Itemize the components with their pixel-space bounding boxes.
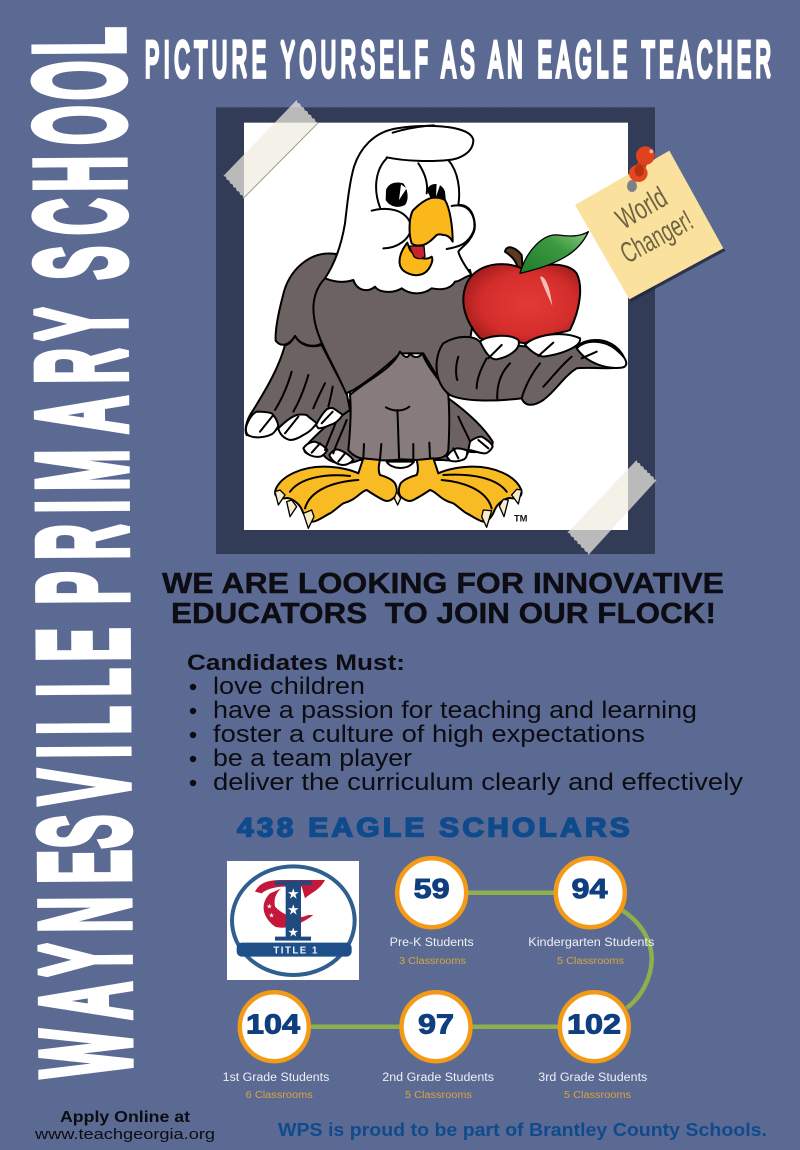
apply online: Apply Online at bbox=[60, 1109, 190, 1126]
frame bbox=[216, 107, 655, 554]
stat: first grade: 104 bbox=[246, 1008, 300, 1040]
stat: pre-k bbox=[390, 858, 474, 967]
right wing and hand bbox=[437, 337, 625, 405]
tape bottom right bbox=[567, 460, 657, 555]
apple bbox=[463, 232, 588, 343]
picture frame with eagle mascot bbox=[216, 100, 726, 555]
slogan: WE ARE LOOKING FOR INNOVATIVE bbox=[162, 568, 724, 600]
apply online bbox=[34, 1109, 215, 1143]
face details bbox=[372, 125, 474, 275]
connector line bbox=[274, 893, 652, 1027]
title 1 logo: ★ bbox=[266, 902, 272, 910]
left foot bbox=[275, 458, 397, 528]
apply online: www.teachgeorgia.org bbox=[34, 1126, 215, 1143]
title 1 logo: ★ bbox=[287, 885, 300, 901]
stat: pre-k: 3 Classrooms bbox=[399, 956, 466, 967]
stat: third grade: 5 Classrooms bbox=[564, 1090, 631, 1101]
stat: kindergarten: Kindergarten Students bbox=[528, 937, 655, 949]
bullet list: be a team player bbox=[213, 745, 412, 772]
bullet list: foster a culture of high expectations bbox=[213, 721, 645, 748]
stat: third grade: 3rd Grade Students bbox=[538, 1072, 648, 1084]
candidate requirements: Candidates Must: bbox=[187, 650, 405, 675]
eagle mascot bbox=[246, 125, 626, 528]
vertical school title: WAYNESVILLE PRIMARY SCHOOL bbox=[13, 28, 154, 1077]
left wing bbox=[246, 253, 350, 440]
bullet list: have a passion for teaching and learning bbox=[213, 697, 697, 724]
sticky note bbox=[575, 151, 726, 302]
stat: third grade: 102 bbox=[567, 1008, 621, 1040]
tape top left bbox=[223, 100, 318, 198]
sticky note: World bbox=[610, 181, 673, 236]
stat: kindergarten: 5 Classrooms bbox=[557, 956, 624, 967]
bullet list: love children bbox=[213, 673, 365, 700]
stat: kindergarten: 94 bbox=[572, 873, 608, 904]
title 1 logo: ★ bbox=[269, 911, 275, 919]
stat: third grade bbox=[538, 992, 648, 1101]
candidate requirements bbox=[187, 650, 744, 796]
trademark: TM bbox=[514, 514, 528, 524]
title 1 logo: TITLE 1 bbox=[273, 945, 318, 956]
right foot bbox=[394, 458, 522, 527]
body bbox=[313, 267, 477, 393]
scholars heading: 438 EAGLE SCHOLARS bbox=[237, 812, 633, 842]
stat: first grade: 1st Grade Students bbox=[223, 1072, 330, 1084]
bullet list bbox=[190, 673, 744, 796]
bullet list: deliver the curriculum clearly and effectively bbox=[213, 769, 744, 796]
heading: PICTURE YOURSELF AS AN EAGLE TEACHER bbox=[145, 32, 771, 88]
stat: second grade bbox=[382, 992, 494, 1101]
stat: second grade: 5 Classrooms bbox=[405, 1090, 472, 1101]
stat: first grade bbox=[223, 992, 330, 1101]
stat: pre-k: 59 bbox=[414, 873, 450, 904]
sticky note: Changer! bbox=[615, 204, 699, 270]
title 1 logo: ★ bbox=[288, 926, 299, 940]
tail feathers bbox=[303, 398, 493, 468]
title 1 logo bbox=[227, 861, 359, 980]
belly bbox=[348, 352, 449, 460]
stat: kindergarten bbox=[528, 858, 655, 967]
slogan: EDUCATORS TO JOIN OUR FLOCK! bbox=[171, 598, 716, 630]
stat: second grade: 97 bbox=[418, 1008, 454, 1040]
stat: second grade: 2nd Grade Students bbox=[382, 1072, 494, 1084]
head bbox=[325, 126, 475, 293]
district note: WPS is proud to be part of Brantley County Schools. bbox=[278, 1120, 767, 1140]
slogan bbox=[162, 568, 724, 630]
stat: pre-k: Pre-K Students bbox=[390, 937, 474, 949]
fingers bbox=[480, 334, 626, 368]
stat: first grade: 6 Classrooms bbox=[246, 1090, 313, 1101]
title 1 logo: ★ bbox=[287, 902, 300, 918]
push pin bbox=[627, 146, 655, 192]
